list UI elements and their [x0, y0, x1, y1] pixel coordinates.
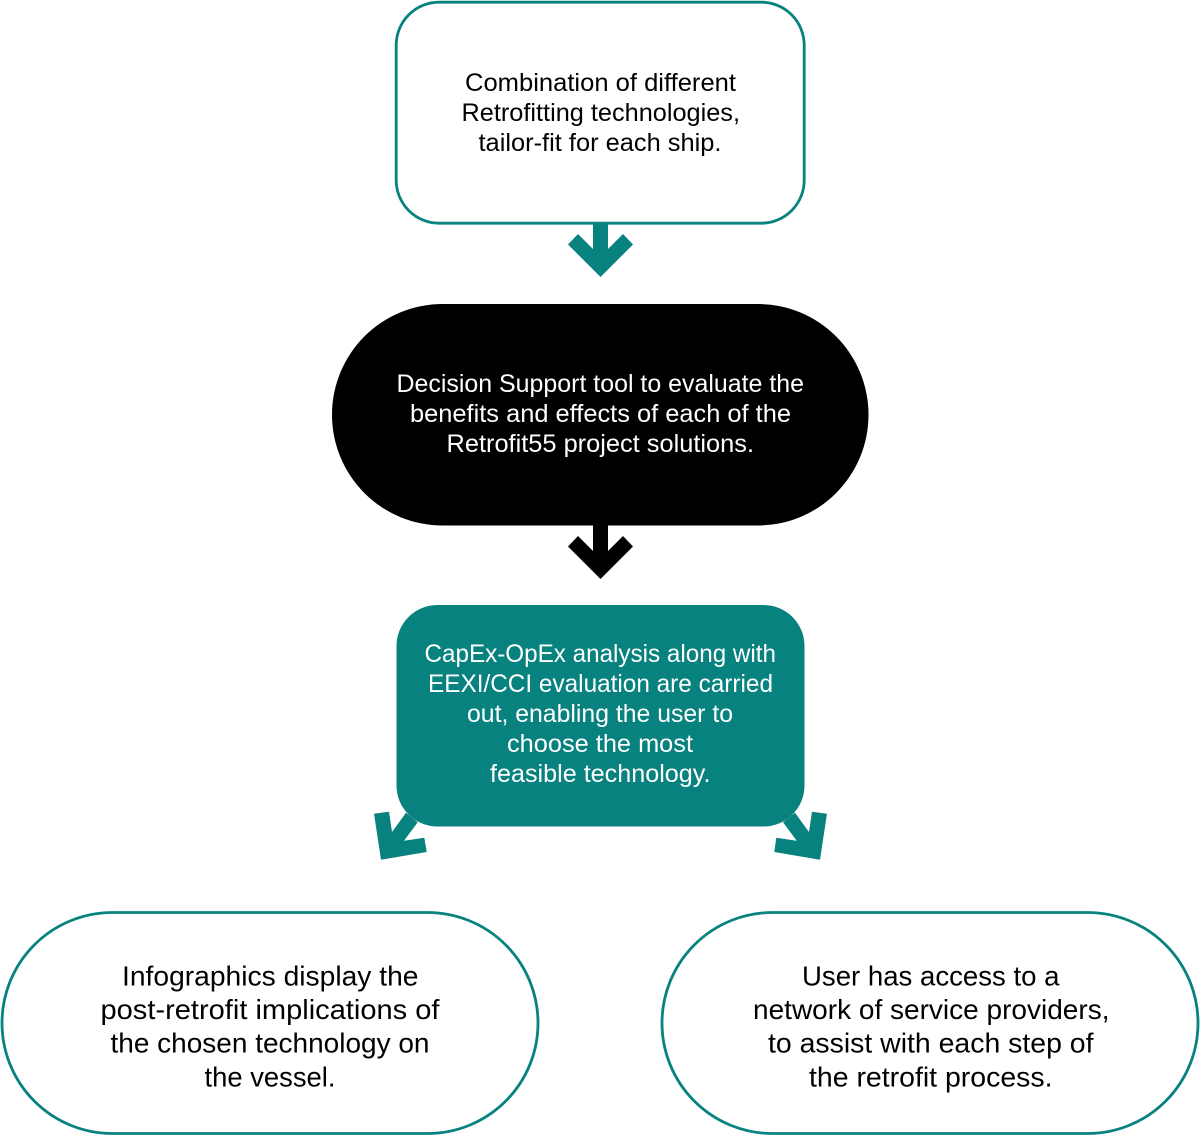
text: capex-opex analysis: feasible technology. [490, 760, 710, 788]
text: retrofitting technologies: Retrofitting technologies, [462, 99, 740, 127]
text: capex-opex analysis: out, enabling the user to [467, 700, 733, 728]
text: retrofitting technologies [462, 69, 740, 157]
text: service providers: the retrofit process. [809, 1062, 1052, 1092]
text: capex-opex analysis: CapEx-OpEx analysis along with [424, 640, 776, 668]
text: capex-opex analysis [424, 640, 776, 788]
text: capex-opex analysis: choose the most [507, 730, 693, 758]
arrow: down to decision support [568, 223, 633, 277]
text: infographics: post-retrofit implications of [100, 994, 440, 1025]
text: decision support tool: Retrofit55 project solutions. [446, 430, 754, 458]
panel: capex-opex analysis [396, 605, 804, 826]
text: infographics: Infographics display the [122, 960, 418, 992]
text: decision support tool: Decision Support tool to evaluate the [396, 370, 804, 398]
text: service providers: User has access to a [802, 960, 1060, 992]
arrow: down-left to infographics [374, 812, 427, 860]
text: capex-opex analysis: EEXI/CCI evaluation are carried [428, 670, 773, 698]
text: infographics: the chosen technology on [110, 1028, 430, 1058]
text: retrofitting technologies: tailor-fit for each ship. [478, 129, 722, 157]
panel: retrofitting technologies [396, 2, 804, 223]
arrow: down to analysis [568, 525, 633, 579]
text: infographics: the vessel. [204, 1062, 336, 1092]
panel: decision support tool [332, 304, 868, 526]
text: retrofitting technologies: Combination of different [465, 69, 736, 97]
text: service providers: network of service providers, [753, 994, 1110, 1025]
text: service providers: to assist with each step of [768, 1028, 1094, 1058]
text: service providers [753, 960, 1110, 1092]
text: infographics [100, 960, 440, 1092]
arrow: down-right to service providers [774, 812, 827, 860]
panel: service providers [662, 912, 1198, 1134]
text: decision support tool [396, 370, 804, 458]
panel: infographics [2, 912, 538, 1134]
text: decision support tool: benefits and effects of each of the [410, 400, 791, 428]
